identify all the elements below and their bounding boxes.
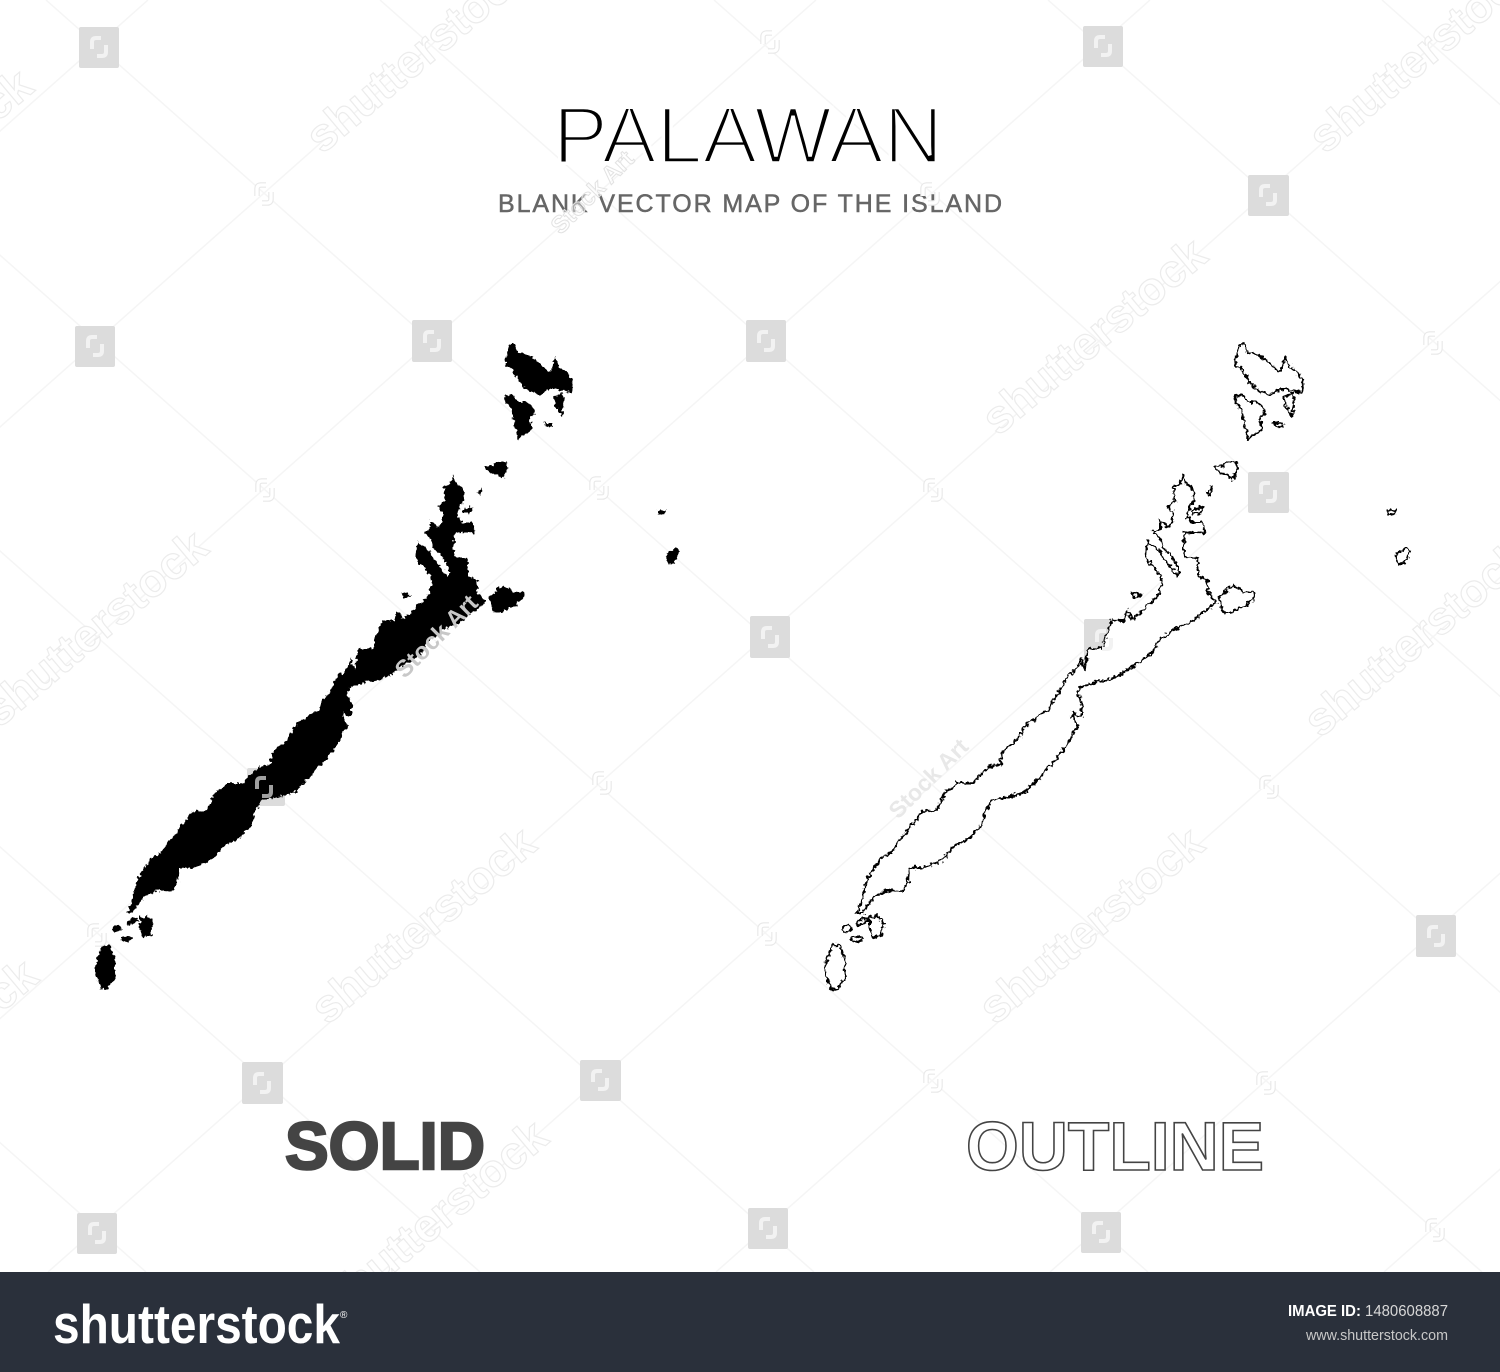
outline map of Palawan [824,343,1409,991]
watermark logo marks outlined [90,33,1442,1239]
watermark wordmarks: shutterstock [968,816,1213,1033]
watermark: Stock Art: Stock Art [390,590,484,684]
site url: www.shutterstock.com [1305,1327,1448,1344]
subtitle: BLANK VECTOR MAP OF THE ISLAND [498,190,1002,218]
image id: IMAGE ID: 1480608887 [1288,1303,1448,1320]
registered mark: ® [340,1310,348,1321]
watermark logo marks on squares [88,37,1443,1242]
title: PALAWAN [553,91,943,181]
watermark wordmarks: shutterstock [971,227,1216,444]
footer logo wordmark: shutterstock [53,1293,340,1355]
label: solid: SOLID [285,1109,485,1184]
watermark: Stock Art: Stock Art [883,733,974,823]
watermark: Stock Art: Stock Art [546,146,640,240]
footer bar [0,1272,1500,1372]
label: outline: OUTLINE [966,1108,1264,1185]
solid map of Palawan [94,343,679,991]
watermark: Stock Art [390,146,974,823]
watermark wordmarks: shutterstock [312,1109,557,1326]
watermark wordmarks: shutterstock [300,816,545,1033]
